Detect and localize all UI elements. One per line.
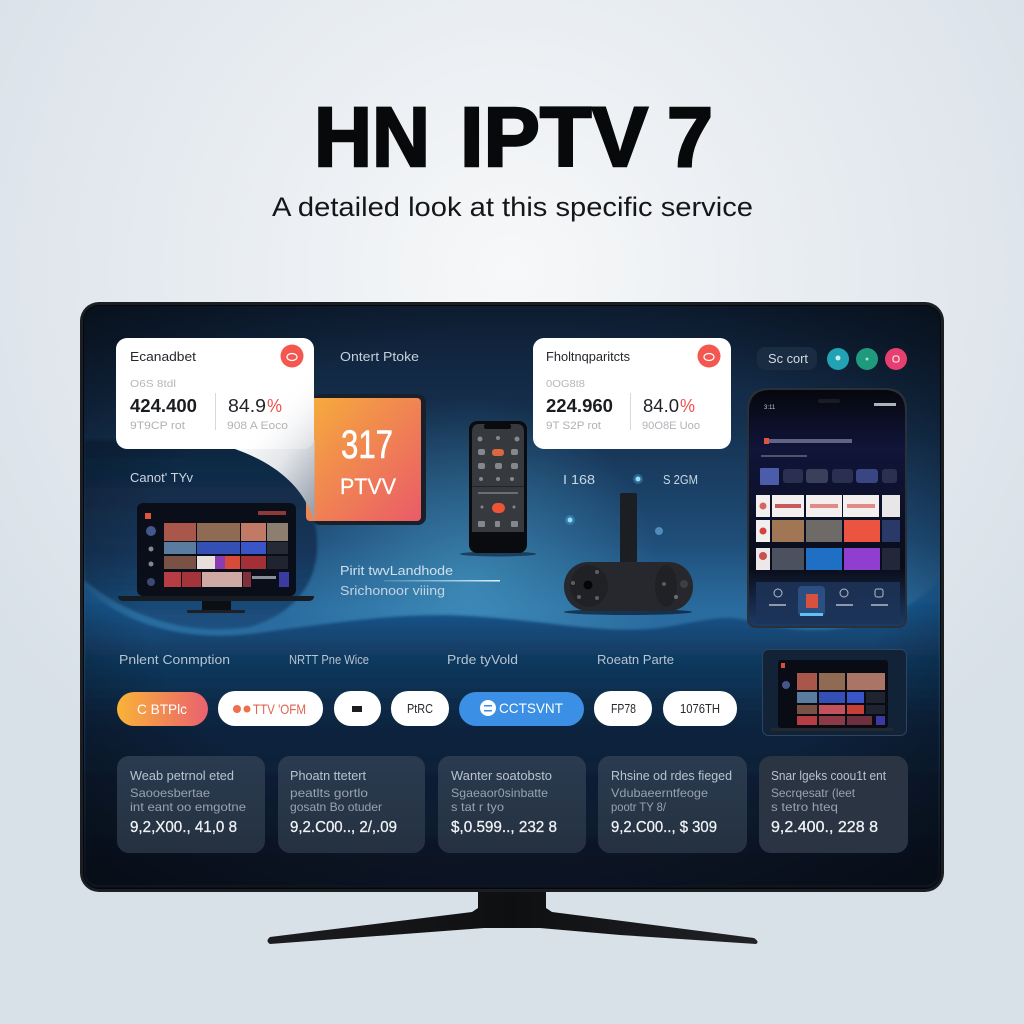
card: Ecanadbet: 908 A Eoco — [227, 420, 288, 432]
phone bottom nav — [756, 582, 900, 624]
title — [314, 90, 713, 184]
card: Ecanadbet: 84.9 — [228, 396, 266, 416]
row labels: Roeatn Parte — [597, 652, 674, 667]
info card 5: Snar lgeks coou1t ent — [771, 768, 886, 783]
label: Ontert Ptoke: Ontert Ptoke — [340, 349, 419, 364]
info card 2: gosatn Bo otuder — [290, 800, 382, 814]
card: Ecanadbet: Ecanadbet — [130, 349, 196, 364]
phone remote — [460, 421, 536, 556]
info card 5: Secrqesatr (leet — [771, 786, 856, 800]
label: Canot TYv: Canot' TYv — [130, 470, 193, 485]
pill buttons: CCTSVNT — [499, 700, 563, 716]
row labels: Pnlent Conmption — [119, 652, 230, 667]
card: Fholtnqparitcts — [533, 338, 731, 449]
pill buttons: FP78 — [611, 702, 636, 716]
pill buttons: 1076TH — [680, 702, 720, 716]
text: Pirit twvLandhode: Pirit twvLandhode — [340, 563, 453, 578]
stat labels: S 2GM — [663, 472, 698, 487]
phone tabs — [760, 468, 897, 485]
info card 2: Phoatn ttetert — [290, 768, 366, 783]
lower wave field — [84, 578, 940, 888]
dark blob behind laptop — [84, 440, 317, 629]
title: 7 — [667, 90, 713, 184]
text: Pirit twvLandhode: Srichonoor viiing — [340, 583, 445, 598]
title: HN — [314, 90, 430, 184]
info card 4 — [598, 756, 747, 853]
pill buttons: PtRC — [407, 702, 433, 716]
card: Fholtnqparitcts: % — [680, 396, 695, 416]
title: IPTV — [460, 90, 648, 184]
orange tablet — [306, 394, 426, 525]
info card 2 — [278, 756, 425, 853]
info card 1 — [117, 756, 265, 853]
card: Ecanadbet — [116, 338, 314, 449]
row labels: Prde tyVold — [447, 652, 518, 667]
info card 3: Wanter soatobsto — [451, 768, 552, 783]
card: Ecanadbet: 9T9CP rot — [130, 420, 185, 432]
screen vignette — [84, 306, 940, 885]
search pill and colored buttons — [757, 347, 907, 370]
info card 5: 9,2.400., 228 8 — [771, 819, 878, 836]
info card 1: Saooesbertae — [130, 786, 210, 800]
card: Fholtnqparitcts: 224.960 — [546, 396, 613, 416]
card: Fholtnqparitcts: 0OG8t8 — [546, 379, 585, 390]
info card 4: Rhsine od rdes fieged — [611, 768, 732, 783]
info card 3: Sgaeaor0sinbatte — [451, 786, 548, 800]
info card 5 — [759, 756, 908, 853]
info card 1: Weab petrnol eted — [130, 768, 234, 783]
streaming stick and controller — [564, 493, 693, 615]
tv stand — [268, 890, 758, 944]
icon: red badge — [280, 344, 304, 368]
text: Pirit twvLandhode — [340, 563, 500, 598]
large phone — [747, 388, 907, 628]
info card 3: $,0.599.., 232 8 — [451, 819, 557, 836]
phone tile grid — [756, 495, 900, 570]
laptop — [118, 503, 314, 613]
search pill and colored buttons: Sc cort — [768, 352, 809, 366]
pill buttons — [117, 691, 737, 726]
large phone: 3:11 — [764, 405, 776, 411]
info card 3 — [438, 756, 586, 853]
info card 5: s tetro hteq — [771, 800, 838, 814]
row labels — [119, 652, 674, 667]
stat labels: I 168 — [563, 472, 595, 487]
pill buttons: TTV 'OFM — [253, 701, 306, 717]
card: Fholtnqparitcts: Fholtnqparitcts — [546, 349, 630, 364]
info card 1: 9,2,X00., 41,0 8 — [130, 819, 237, 836]
card: Ecanadbet: O6S 8tdl — [130, 379, 176, 390]
card: Ecanadbet: 424.400 — [130, 396, 197, 416]
info card 1: int eant oo emgotne — [130, 800, 246, 814]
info card 4: Vdubaeerntfeoge — [611, 786, 708, 800]
card: Fholtnqparitcts: 9T S2P rot — [546, 420, 601, 432]
info card 4: pootr TY 8/ — [611, 800, 667, 814]
tablet number: 317 — [341, 423, 393, 467]
subtitle: A detailed look at this specific service — [272, 192, 753, 222]
pill buttons: C BTPlc — [137, 701, 187, 717]
thumbnail tile — [762, 650, 906, 736]
card: Fholtnqparitcts: 84.0 — [643, 396, 679, 416]
info card 2: 9,2.C00.., 2/,.09 — [290, 819, 397, 836]
tv frame — [80, 302, 944, 892]
card: Ecanadbet: % — [267, 396, 282, 416]
white sweep under first card — [200, 440, 314, 522]
info card 2: peatlts gortlo — [290, 786, 368, 800]
tablet label: PTVV — [340, 474, 396, 499]
row labels: NRTT Pne Wice — [289, 652, 369, 667]
info card 4: 9,2.C00.., $ 309 — [611, 819, 717, 836]
stat labels — [563, 472, 698, 487]
card: Fholtnqparitcts: 90O8E Uoo — [642, 420, 700, 432]
screen glow — [280, 395, 660, 775]
info card 3: s tat r tyo — [451, 800, 504, 814]
glow dots — [565, 474, 663, 535]
icon: red badge — [698, 344, 720, 368]
